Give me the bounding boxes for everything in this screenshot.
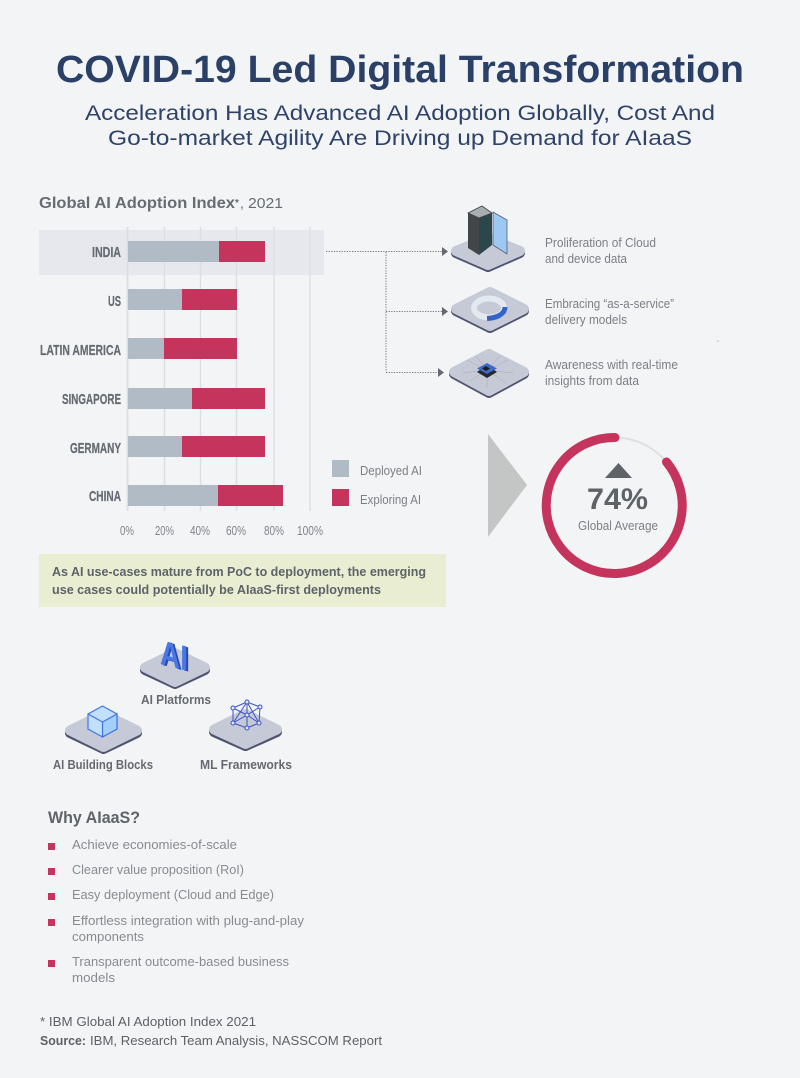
text: cloud and device data [545, 236, 656, 266]
text: real-time insights [545, 358, 678, 388]
icon: ML frameworks [214, 700, 277, 746]
country labels: GERMANY [70, 440, 121, 457]
axis labels: 20% [155, 524, 174, 538]
country labels: US [108, 293, 121, 310]
country labels: INDIA [92, 244, 121, 261]
icon: AI platforms: AI [160, 632, 188, 679]
text: cloud and device data: Proliferation of Cloud [545, 236, 656, 250]
chart heading: 2021 [248, 196, 283, 212]
bar: Singapore [128, 388, 265, 409]
label: AI Platforms: AI Platforms [141, 693, 211, 707]
donut: 74% global average: 74% [587, 483, 648, 516]
bar chart: Global AI Adoption Index [39, 227, 324, 538]
chart heading: , [240, 195, 244, 211]
label: ML Frameworks: ML Frameworks [200, 758, 292, 772]
bullet list: why AIaaS: Transparent outcome-based business [72, 954, 289, 969]
bullet list: why AIaaS: Clearer value proposition (RoI) [72, 862, 244, 877]
text: as-a-service: delivery models [545, 313, 627, 327]
icon: microchip platform [454, 354, 524, 393]
donut: 74% global average: Global Average [578, 519, 658, 533]
bullet list: why AIaaS: Achieve economies-of-scale [72, 837, 237, 852]
text: real-time insights: insights from data [545, 374, 639, 388]
text: as-a-service [545, 297, 674, 327]
dotted connector arrows [326, 247, 448, 377]
callout: As AI use-cases mature from PoC to deployment, the emerging [52, 565, 426, 579]
bullet list: why AIaaS [48, 837, 305, 985]
source: IBM, Research Team Analysis, NASSCOM Report [90, 1033, 382, 1048]
country labels: CHINA [89, 488, 121, 505]
subtitle: Acceleration Has Advanced AI Adoption Globally, Cost And [85, 101, 715, 125]
callout [39, 554, 446, 607]
icon: AI building blocks [70, 706, 137, 749]
label: AI Building Blocks: AI Building Blocks [53, 758, 153, 772]
country labels [40, 244, 121, 505]
heading: Why AIaaS?: Why AIaaS? [48, 809, 140, 827]
icon: as-a-service ring platform [456, 292, 524, 328]
icon: server rack platform [456, 206, 520, 267]
legend [332, 460, 422, 507]
footnote: * IBM Global AI Adoption Index 2021 [40, 1014, 256, 1029]
legend: Exploring AI [360, 493, 421, 507]
icon: AI platforms: AI [162, 633, 190, 680]
axis labels: 60% [226, 524, 246, 538]
text: cloud and device data: and device data [545, 252, 627, 266]
bar: US [128, 289, 237, 310]
icon: AI platforms [145, 632, 205, 684]
bullet list: why AIaaS: models [72, 970, 115, 985]
axis labels: 0% [120, 524, 134, 538]
axis labels: 100% [297, 524, 323, 538]
axis labels [120, 524, 323, 538]
source: Source: [40, 1033, 86, 1048]
legend: Deployed AI [360, 464, 422, 478]
bar: Latin America [128, 338, 237, 359]
bullet list: why AIaaS: components [72, 929, 145, 944]
country labels: SINGAPORE [62, 391, 121, 408]
country labels: LATIN AMERICA [40, 342, 121, 359]
highlight band: India [39, 230, 324, 275]
axis labels: 40% [190, 524, 210, 538]
big arrow [488, 434, 527, 537]
bar: Germany [128, 436, 265, 457]
text: as-a-service: Embracing “as-a-service” [545, 297, 674, 311]
text: real-time insights: Awareness with real-time [545, 358, 678, 372]
donut: 74% global average [546, 437, 682, 573]
bar: India [128, 241, 265, 262]
bar: China [128, 485, 283, 506]
bullet list: why AIaaS: Effortless integration with plug-and-play [72, 913, 305, 928]
axis labels: 80% [264, 524, 284, 538]
chart heading: * [235, 198, 239, 209]
callout: use cases could potentially be AIaaS-first deployments [52, 583, 381, 597]
subtitle [85, 101, 715, 150]
title: COVID-19 Led Digital Transformation [56, 49, 744, 91]
subtitle: Go-to-market Agility Are Driving up Demand for AIaaS [108, 126, 692, 150]
chart heading: Global AI Adoption Index [39, 195, 235, 212]
bullet list: why AIaaS: Easy deployment (Cloud and Edge) [72, 887, 274, 902]
